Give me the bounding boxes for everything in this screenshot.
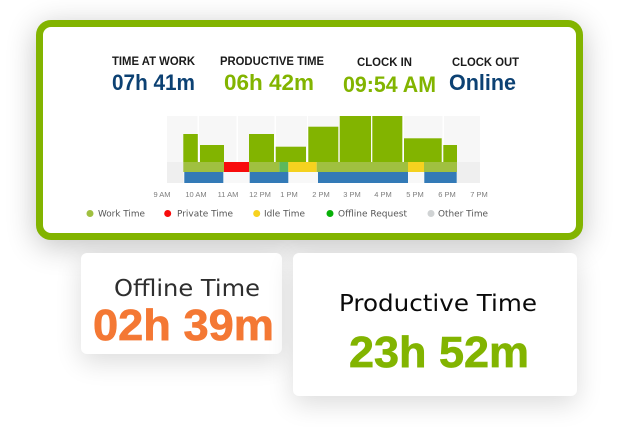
lower row gaps — [183, 172, 457, 183]
chart: hourly activity timeline — [153, 116, 488, 199]
stat: productive time — [220, 54, 324, 95]
hour axis labels: 3 PM — [343, 190, 361, 199]
hour axis labels: 4 PM — [374, 190, 392, 199]
offline time text — [93, 276, 274, 350]
timeline track — [167, 162, 480, 183]
legend: Work Time — [98, 210, 145, 220]
stat: clock in — [343, 55, 436, 97]
hour axis labels: 2 PM — [312, 190, 330, 199]
productive time text: 23h 52m — [349, 328, 529, 377]
stat: productive time: 06h 42m — [224, 70, 314, 95]
stat: clock out: Online — [449, 70, 516, 95]
hour axis labels: 11 AM — [218, 190, 238, 199]
hour axis labels — [153, 190, 488, 199]
hour axis labels: 12 PM — [249, 190, 271, 199]
stat: clock out — [449, 55, 520, 95]
hour axis labels: 10 AM — [185, 190, 207, 199]
stat: time at work: TIME AT WORK — [112, 54, 195, 68]
blue sessions row — [184, 172, 457, 183]
stat: clock in: 09:54 AM — [343, 72, 436, 97]
legend: Idle Time — [264, 210, 305, 220]
activity bars — [183, 116, 457, 162]
legend: Private Time — [177, 210, 233, 220]
stat: clock out: CLOCK OUT — [452, 55, 520, 69]
panel: main dashboard card — [36, 20, 583, 240]
panel: offline time card — [81, 253, 282, 354]
hour axis labels: 1 PM — [280, 190, 298, 199]
status band — [183, 162, 457, 172]
hour axis labels: 7 PM — [470, 190, 488, 199]
hour axis labels: 5 PM — [406, 190, 424, 199]
stat: productive time: PRODUCTIVE TIME — [220, 54, 324, 68]
productive time text — [339, 291, 537, 377]
legend — [86, 210, 488, 220]
stat: clock in: CLOCK IN — [357, 55, 412, 69]
chart background columns — [167, 116, 480, 162]
stat: time at work — [112, 54, 195, 95]
legend: Offline Request — [338, 210, 408, 220]
stat: time at work: 07h 41m — [112, 70, 195, 95]
offline time text: Offline Time — [114, 276, 260, 302]
legend: Other Time — [438, 210, 488, 220]
productive time text: Productive Time — [339, 291, 537, 317]
offline time text: 02h 39m — [93, 301, 274, 350]
hour axis labels: 6 PM — [438, 190, 456, 199]
panel: productive time card — [293, 253, 577, 396]
hour axis labels: 9 AM — [153, 190, 171, 199]
